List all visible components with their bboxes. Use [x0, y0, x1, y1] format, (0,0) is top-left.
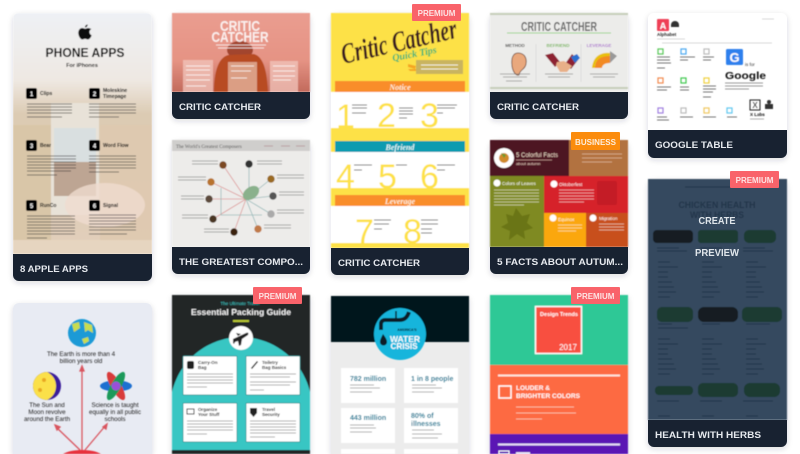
fact: earth age: The Earth is more than 4	[47, 351, 116, 358]
box: organize your stuff: Your Stuff	[198, 412, 220, 417]
preview: quick tips poster	[331, 13, 469, 251]
box: organize your stuff: Organize	[198, 407, 218, 412]
preview: quick tips poster: Quick Tips	[391, 45, 438, 64]
section: befriend	[331, 141, 469, 196]
preview: alphabet table: Google	[725, 70, 766, 82]
card: google table	[648, 13, 787, 158]
numbered items: RunCo	[40, 203, 56, 209]
fact: science: equally in all public	[89, 409, 141, 416]
badge: premium	[571, 287, 620, 304]
preview: network map: The World's Greatest Composers	[176, 145, 242, 150]
numbered items: 3	[30, 144, 34, 150]
label bar	[331, 248, 469, 275]
label: GOOGLE TABLE	[655, 140, 733, 151]
preview: herbs with hover overlay: WITH HERBS	[690, 210, 744, 220]
swatch: design trends 2017: 2017	[559, 343, 577, 352]
fact: earth age: billion years old	[60, 358, 103, 365]
badge: premium: PREMIUM	[259, 292, 297, 301]
section: befriend: 6	[420, 158, 439, 196]
badge: premium	[412, 4, 461, 21]
stat: 443 million	[341, 408, 395, 443]
preview: colour blocks: Oktoberfest	[559, 182, 583, 187]
title: phone apps: PHONE APPS	[46, 45, 125, 60]
card: design trends	[490, 287, 628, 454]
card: critic catcher photo	[172, 13, 310, 119]
card: critic catcher icons	[490, 13, 628, 119]
preview: colour blocks: Equinox	[558, 217, 575, 222]
box: travel security	[246, 403, 300, 442]
label bar	[490, 247, 628, 274]
stat: 782 million: 782 million	[350, 376, 386, 383]
section: louder and brighter colors: BRIGHTER COLORS	[516, 393, 581, 400]
numbered items: Timepage	[103, 94, 126, 100]
card: essential packing guide	[172, 287, 310, 454]
stat: 443 million: 443 million	[350, 415, 386, 422]
icon: apple logo	[78, 24, 92, 40]
section: notice: 2	[377, 97, 396, 135]
infographic preview: phone apps	[13, 13, 152, 254]
numbered items: 6	[93, 204, 97, 210]
box: carry-on bag	[183, 356, 237, 395]
section: louder and brighter colors: LOUDER &	[516, 385, 550, 392]
preview: alphabet table	[657, 19, 774, 120]
fact: science: Science is taught	[91, 402, 139, 409]
card: critic catcher quick tips	[331, 4, 469, 275]
badge: business	[571, 132, 620, 150]
box: organize your stuff	[183, 403, 237, 442]
preview: alphabet table: is for	[745, 62, 755, 67]
preview: colour blocks: 5 Colorful Facts	[516, 153, 558, 159]
label: 8 apple apps: 8 APPLE APPS	[20, 264, 88, 275]
preview: three icons	[490, 13, 628, 92]
icon: faucet badge	[374, 308, 426, 360]
icon: earth	[68, 319, 96, 347]
preview: three icons: METHOD	[505, 43, 525, 48]
icon: faucet badge: AMERICA'S	[397, 328, 417, 332]
box: carry-on bag: Carry-On	[198, 360, 218, 365]
numbered items: Moleskine	[103, 88, 127, 94]
section: notice: 3	[420, 97, 439, 135]
card: greatest composers	[172, 140, 310, 274]
label: CRITIC CATCHER	[338, 258, 420, 269]
script title: Critic Catcher	[338, 13, 461, 71]
icon: G is for google	[726, 49, 743, 65]
label bar	[648, 420, 787, 447]
label bar	[172, 92, 310, 119]
label bar	[172, 247, 310, 274]
preview: alphabet table: Alphabet	[657, 32, 677, 37]
section: purple	[490, 434, 628, 454]
label bar	[490, 92, 628, 119]
poster title: CRITIC	[220, 18, 260, 35]
box: carry-on bag: Bag	[198, 365, 207, 370]
stat: 80% of illnesses: 80% of	[411, 413, 434, 420]
numbered items: Signal	[103, 203, 119, 209]
section: louder and brighter colors	[490, 365, 628, 434]
icon: faucet badge: WATER	[390, 334, 420, 344]
icon: leaf	[501, 208, 533, 240]
stat: 80% of illnesses	[404, 408, 458, 443]
preview: photo poster	[172, 13, 310, 92]
preview: three icons: BEFRIEND	[546, 43, 570, 48]
stat: 1 in 8 people	[404, 368, 458, 403]
badge: premium	[730, 171, 779, 188]
box: toiletry bag basics: Toiletry	[262, 360, 278, 365]
label: 5 FACTS ABOUT AUTUM...	[497, 257, 623, 268]
section: leverage: 8	[403, 213, 422, 251]
heading: The Ultimate Travel	[220, 301, 260, 306]
icon: moon	[33, 372, 61, 400]
section: leverage	[331, 195, 469, 251]
preview: colour blocks: about autumn	[516, 161, 540, 166]
label bar	[648, 130, 787, 158]
icon: ear	[512, 53, 526, 75]
preview: three icons: LEVERAGE	[587, 43, 611, 48]
label: CRITIC CATCHER	[179, 102, 261, 113]
red dome	[63, 450, 101, 454]
numbered items: 5	[30, 204, 34, 210]
label: CRITIC CATCHER	[497, 102, 579, 113]
preview: herbs with hover overlay	[648, 179, 787, 420]
card: 8 apple apps	[13, 13, 152, 281]
section: befriend: Befriend	[385, 143, 415, 152]
box: travel security: Security	[262, 412, 280, 417]
button: create: CREATE	[698, 216, 736, 227]
badge: premium: PREMIUM	[736, 176, 774, 185]
card: essential packing guide: Essential Packing Guide	[191, 307, 291, 317]
teal dome	[172, 337, 310, 450]
box: travel security: Travel	[262, 407, 275, 412]
icon: atom	[100, 370, 132, 402]
icon: rainbow arrow	[595, 56, 610, 68]
preview: herbs with hover overlay: CHICKEN HEALTH	[678, 200, 756, 210]
card: water crisis	[331, 296, 469, 454]
label: HEALTH WITH HERBS	[655, 430, 761, 441]
icon: handshake	[545, 53, 580, 72]
arrows	[55, 366, 107, 450]
preview: colour blocks: Migration	[599, 216, 618, 221]
section: leverage: 7	[355, 213, 374, 251]
preview: colour blocks	[490, 140, 628, 247]
section: notice	[331, 81, 469, 136]
fact: sun and moon: The Sun and	[29, 402, 65, 409]
numbered items	[26, 88, 136, 238]
card: health with herbs	[648, 171, 787, 447]
numbered items: 2	[93, 92, 97, 98]
stat: 80% of illnesses: illnesses	[411, 421, 441, 428]
preview: alphabet table: X Labs	[750, 112, 765, 117]
section: leverage: Leverage	[384, 197, 416, 206]
icon: faucet badge: CRISIS	[390, 341, 418, 351]
subtitle: For iPhones	[66, 63, 98, 69]
fact: science: schools	[105, 416, 125, 423]
box: toiletry bag basics	[246, 356, 300, 395]
numbered items: 1	[30, 92, 34, 98]
label bar	[13, 254, 152, 281]
fact: sun and moon: around the Earth	[24, 416, 71, 423]
section: notice: Notice	[388, 83, 411, 92]
numbered items: Bear	[40, 143, 51, 149]
card: earth facts	[13, 303, 152, 454]
numbered items: Word Flow	[103, 143, 129, 149]
section: befriend: 4	[336, 158, 355, 196]
preview: alphabet table: G	[729, 50, 740, 65]
stat: 782 million	[341, 368, 395, 403]
box: toiletry bag basics: Bag Basics	[262, 365, 287, 370]
preview: alphabet table: A	[660, 21, 667, 31]
swatch: design trends 2017	[536, 306, 582, 354]
preview: colour blocks: Colors of Leaves	[502, 181, 537, 186]
icon: plane	[229, 326, 253, 350]
preview: three icons: CRITIC CATCHER	[521, 19, 597, 34]
section: notice: 1	[336, 98, 355, 136]
section: befriend: 5	[378, 158, 397, 196]
preview: photo poster: CATCHER	[212, 29, 269, 46]
badge: premium: PREMIUM	[577, 292, 615, 301]
stat: 1 in 8 people: 1 in 8 people	[411, 376, 454, 383]
numbered items: 4	[93, 144, 97, 150]
badge: premium: PREMIUM	[418, 9, 456, 18]
label: THE GREATEST COMPO...	[179, 257, 303, 268]
button: preview: PREVIEW	[695, 248, 740, 259]
numbered items: Clips	[40, 91, 52, 97]
swatch: design trends 2017: Design Trends	[540, 312, 578, 318]
badge: business: BUSINESS	[575, 138, 617, 147]
card: 5 facts about autumn	[490, 132, 628, 274]
fact: sun and moon: Moon revolve	[28, 409, 66, 416]
badge: premium	[253, 287, 302, 304]
preview: alphabet table: X	[752, 101, 758, 110]
